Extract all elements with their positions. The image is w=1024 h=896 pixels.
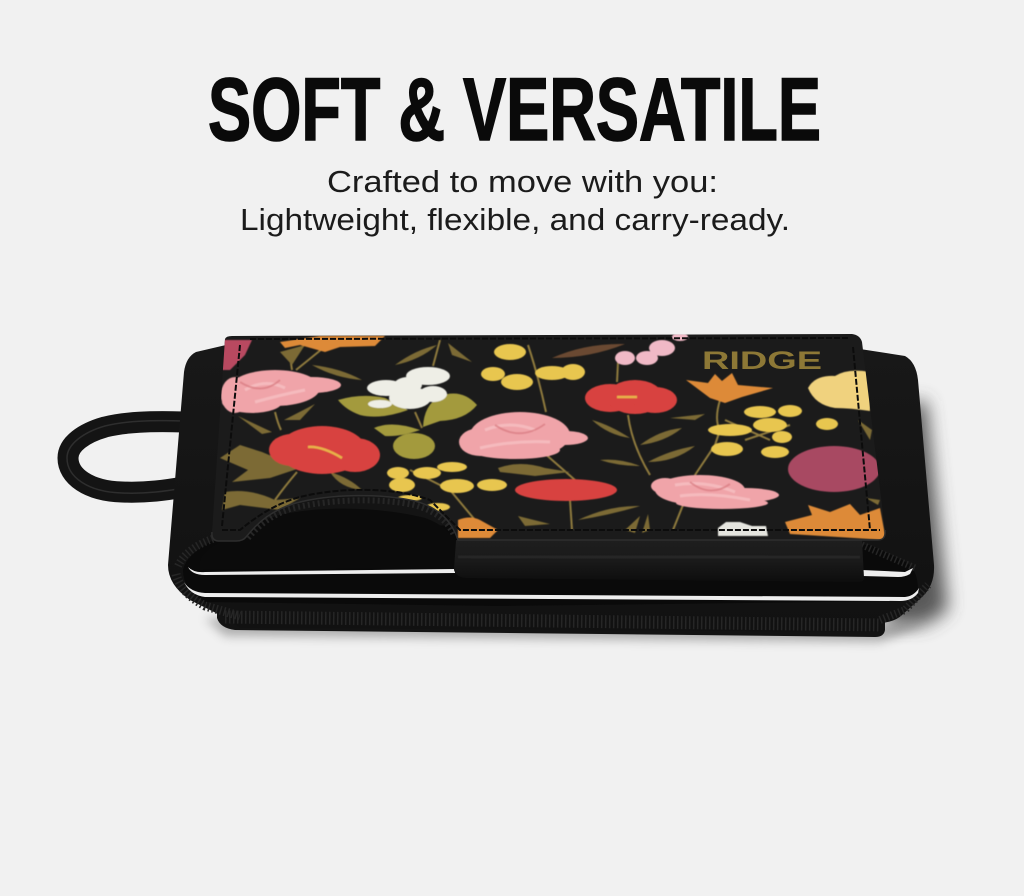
orange flowers: [280, 336, 886, 540]
lower card edge: [184, 582, 919, 601]
brand logo: RIDGE: [702, 347, 822, 375]
leather pull strap: [454, 540, 864, 582]
floral top plate: [212, 333, 886, 541]
elastic band: [168, 345, 934, 632]
red poppies: [269, 380, 677, 501]
wallet interior: [183, 525, 918, 606]
drop shadow: [205, 400, 948, 642]
pink peonies: [221, 370, 779, 509]
pocket lip weave: [248, 500, 454, 538]
bottom leather plate: [217, 612, 885, 637]
key ring: [67, 421, 184, 493]
yellow flowers: [387, 344, 838, 511]
stitching: [222, 338, 880, 530]
subtitle: Lightweight, flexible, and carry-ready.: [240, 202, 790, 237]
cream flower: [808, 371, 870, 411]
stems and foliage: [275, 340, 790, 530]
right card edge: [862, 568, 913, 577]
wallet: [168, 333, 934, 637]
light pink blossoms: [615, 333, 688, 365]
upper card edge: [188, 567, 455, 575]
elastic lower edge weave: [176, 538, 928, 625]
white flower cluster: [367, 367, 450, 409]
partial white flowers at edge: [718, 522, 768, 536]
magenta flowers: [788, 446, 880, 492]
plate edge highlight: [212, 496, 885, 541]
bronze leaves: [220, 343, 880, 533]
olive leaves: [338, 393, 477, 459]
subtitle: [240, 164, 790, 237]
pocket opening: [199, 509, 455, 570]
subtitle: Crafted to move with you:: [327, 164, 718, 199]
